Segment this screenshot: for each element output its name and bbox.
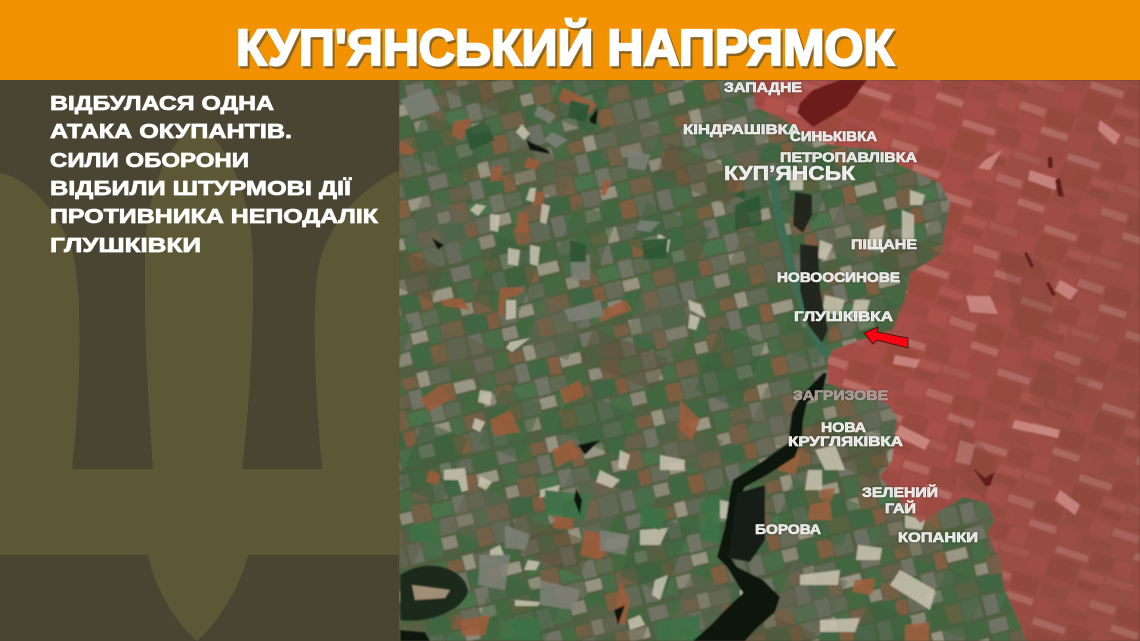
place labels: ГЛУШКІВКА [794,309,893,324]
arrow: attack direction [864,327,908,348]
place labels: ПІЩАНЕ [851,237,917,252]
icon: trident emblem [0,122,399,641]
east-bank forest [728,485,765,562]
place labels: БОРОВА [755,522,821,537]
dark red area [797,80,867,127]
panel: summary with trident emblem [0,80,399,641]
dark forest [793,192,828,343]
southwest forest [400,566,468,621]
map: satellite terrain [399,80,1140,641]
summary text: АТАКА ОКУПАНТІВ. [50,121,292,143]
summary text: ГЛУШКІВКИ [50,235,201,257]
place labels: КІНДРАШІВКА [683,122,800,137]
place labels: ЗАГРИЗОВЕ [793,388,888,403]
summary text: ПРОТИВНИКА НЕПОДАЛІК [50,206,379,228]
summary text: ВІДБИЛИ ШТУРМОВІ ДІЇ [50,177,352,200]
title: КУП'ЯНСЬКИЙ НАПРЯМОК [238,20,897,78]
place labels: ПЕТРОПАВЛІВКА [780,150,917,165]
place labels: НОВА [821,420,866,435]
reservoir [693,373,827,641]
place labels: КОПАНКИ [898,530,978,545]
place labels: ЗЕЛЕНИЙ [862,485,938,500]
summary text: СИЛИ ОБОРОНИ [50,150,249,172]
place labels: КУП’ЯНСЬК [724,163,856,185]
red occupied zone [740,80,1140,641]
place labels: НОВООСИНОВЕ [777,270,900,285]
place labels: КРУГЛЯКІВКА [788,434,903,449]
small ponds [432,108,625,625]
river strip [773,180,824,352]
place labels [683,80,978,545]
summary text [50,93,379,257]
place labels: СИНЬКІВКА [790,129,877,144]
place labels: ГАЙ [885,501,916,516]
field patches [400,88,935,641]
place labels: ЗАПАДНЕ [724,80,802,95]
title: КУП'ЯНСЬКИЙ НАПРЯМОК [236,18,895,76]
header bar [0,0,1140,80]
summary text: ВІДБУЛАСЯ ОДНА [50,93,274,115]
